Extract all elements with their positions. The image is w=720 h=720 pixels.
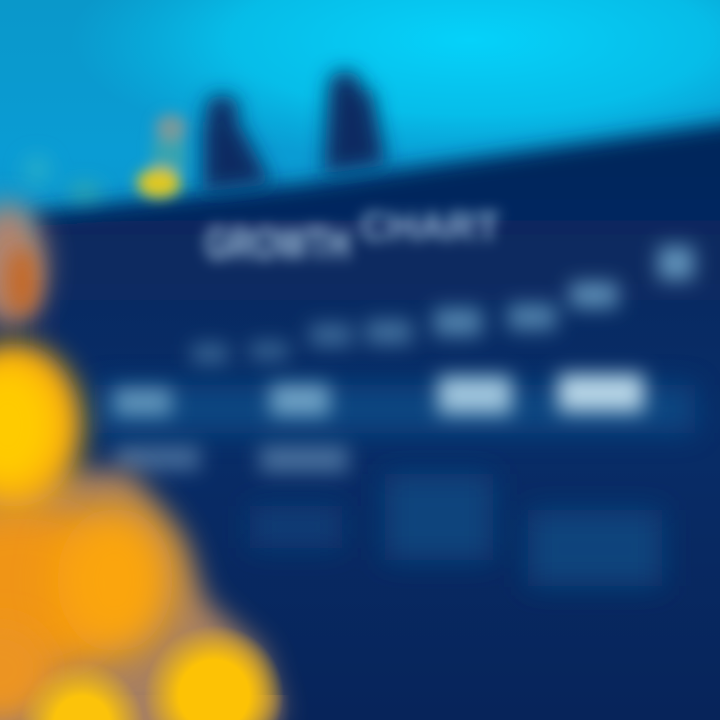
bar chart: lower blocks [250,474,662,586]
text block: lower labels [116,446,348,472]
figure: dark middle silhouette [203,95,272,192]
background: blue sky [0,0,720,280]
bokeh: brown haze [0,470,282,720]
bokeh: bottom yellow left [20,660,144,720]
bokeh: peach top [0,203,46,327]
title: GROWTH [205,217,350,269]
figure: far left teal [23,155,101,200]
title [205,205,500,269]
title: CHART [360,205,500,249]
bokeh: bottom yellow right [140,620,290,720]
figure: yellow and tan [137,114,187,198]
value labels [114,374,644,416]
icon: small figures on the board edge [23,71,386,200]
foreground: blurred orange bokeh [0,203,290,720]
bokeh: orange mass [0,505,135,675]
chart: rising row of labels [192,246,694,364]
figure: dark right silhouette [324,71,386,174]
chart band: middle row with values [95,374,695,433]
bokeh: large yellow left [0,343,82,507]
